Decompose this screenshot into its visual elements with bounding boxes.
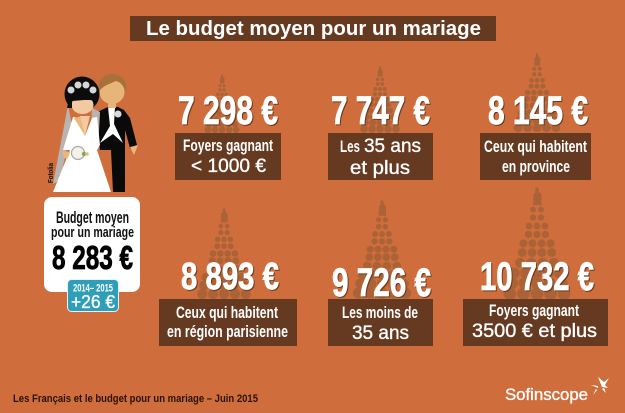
panel: ceux qui habitent en province — [480, 53, 591, 180]
illustration: bride and groom — [53, 74, 138, 192]
badge: 2014-2015 change: 2014– 2015 — [73, 282, 113, 294]
panel: foyers gagnant 3500 euros et plus: Foyers gagnant — [489, 301, 579, 320]
title: Le budget moyen pour un mariage — [146, 18, 481, 40]
panel: ceux qui habitent en province: en province — [502, 157, 570, 176]
panel: les moins de 35 ans: 35 ans — [352, 323, 409, 344]
panel: les moins de 35 ans: Les moins de — [342, 303, 418, 322]
card: average budget: pour un mariage — [51, 224, 134, 241]
panel: foyers gagnant moins de 1000 euros — [175, 74, 281, 180]
panel: foyers gagnant 3500 euros et plus: 3500 € et plus — [472, 321, 597, 342]
panel: ceux qui habitent en region parisienne — [159, 208, 297, 346]
bride — [53, 76, 111, 192]
panel: les moins de 35 ans — [328, 200, 433, 346]
panel: les 35 ans et plus — [328, 66, 433, 180]
panel: foyers gagnant moins de 1000 euros: < 1000 € — [191, 156, 266, 177]
groom — [95, 74, 138, 192]
badge: 2014-2015 change — [68, 280, 118, 312]
panel: ceux qui habitent en region parisienne: Ceux qui habitent — [176, 303, 278, 322]
panel: foyers gagnant moins de 1000 euros: 7 298 € — [178, 89, 278, 133]
photo credit: Fotolia — [48, 163, 55, 183]
panel: foyers gagnant 3500 euros et plus — [463, 187, 608, 346]
panel: ceux qui habitent en province: 8 145 € — [488, 89, 588, 133]
panel: ceux qui habitent en region parisienne: 8 893 € — [181, 256, 279, 298]
panel: ceux qui habitent en province: Ceux qui habitent — [484, 137, 587, 156]
veil — [53, 105, 72, 184]
logo: Sofinscope — [505, 377, 609, 404]
card: average budget: Budget moyen — [56, 208, 129, 227]
panel: les 35 ans et plus: 35 ans — [364, 136, 421, 157]
panel: les moins de 35 ans: 9 726 € — [332, 261, 431, 305]
card: average budget: 8 283 € — [52, 239, 133, 276]
badge: 2014-2015 change: +26 € — [71, 292, 115, 312]
panel: les 35 ans et plus: 7 747 € — [331, 89, 430, 133]
card: average budget — [44, 197, 140, 292]
panel: foyers gagnant moins de 1000 euros: Foyers gagnant — [183, 136, 273, 155]
panel: ceux qui habitent en region parisienne: en région parisienne — [167, 322, 288, 341]
panel: les 35 ans et plus: Les — [340, 137, 360, 156]
footer source: Les Français et le budget pour un mariage – Juin 2015 — [13, 393, 258, 405]
bouquet — [72, 146, 89, 160]
logo: Sofinscope: Sofinscope — [505, 385, 588, 404]
panel: les 35 ans et plus: et plus — [350, 158, 410, 179]
